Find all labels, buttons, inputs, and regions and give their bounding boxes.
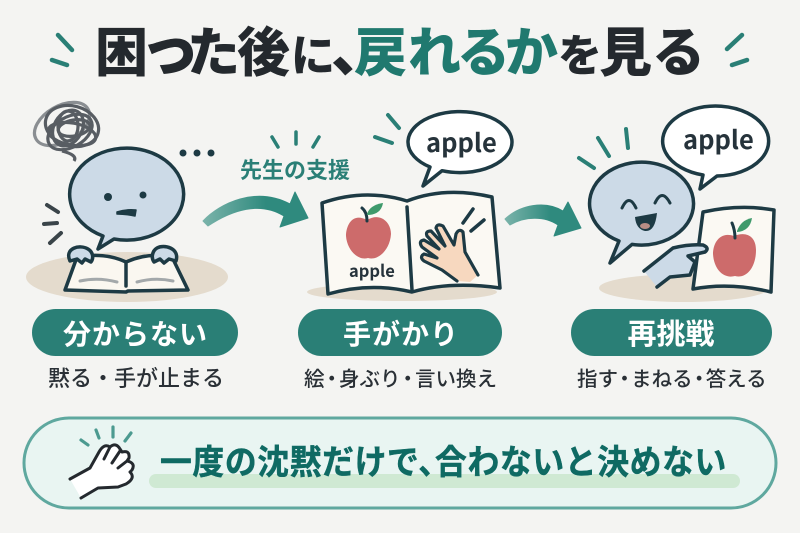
step pill: hints: 手がかり bbox=[343, 318, 459, 350]
speech bubble: apple bbox=[663, 106, 769, 189]
speech bubble: apple: apple bbox=[426, 123, 497, 160]
joy marks bbox=[579, 129, 628, 168]
speech bubble: apple bbox=[408, 112, 512, 186]
label: teacher support: 先生の支援 bbox=[240, 158, 350, 183]
step pill: retry bbox=[571, 309, 772, 356]
picture book bbox=[322, 192, 500, 294]
callout text: 一度の沈黙だけで、合わないと決めない bbox=[160, 443, 727, 481]
icon: hand bbox=[70, 427, 133, 498]
icon: gesturing hand bbox=[420, 225, 478, 282]
title: た bbox=[187, 24, 240, 83]
speech bubble: apple: apple bbox=[683, 120, 754, 157]
surprise marks bbox=[44, 205, 61, 243]
title: れ bbox=[408, 24, 461, 83]
title: に bbox=[291, 32, 335, 81]
highlight band bbox=[149, 474, 740, 488]
title: か bbox=[505, 24, 558, 83]
scene: retry bbox=[579, 106, 774, 302]
character: speech bubble head bbox=[70, 148, 184, 249]
title: っ bbox=[140, 17, 200, 84]
callout panel bbox=[24, 418, 776, 508]
open book bbox=[65, 255, 188, 292]
arrow: teacher support bbox=[203, 192, 308, 227]
marks bbox=[375, 115, 399, 143]
table shadow bbox=[26, 252, 228, 302]
title: 、 bbox=[331, 19, 389, 84]
table shadow bbox=[307, 283, 497, 301]
hands bbox=[69, 247, 177, 263]
scene: does not understand bbox=[26, 93, 228, 302]
character: smiling bubble bbox=[590, 162, 694, 263]
caption: step 3: 指す・まねる・答える bbox=[577, 367, 767, 391]
title: 戻 bbox=[354, 24, 407, 83]
step pill: does not understand: 分からない bbox=[63, 319, 208, 350]
pointing hand bbox=[644, 245, 707, 287]
caption: step 1: 黙る・手が止まる bbox=[48, 366, 224, 391]
title: 困 bbox=[95, 24, 148, 83]
icon: apple bbox=[346, 203, 391, 258]
title: 見 bbox=[599, 24, 652, 83]
arrow: to retry bbox=[505, 202, 581, 236]
title: る bbox=[457, 24, 510, 83]
icon: confused scribble bbox=[27, 93, 103, 161]
apple card bbox=[693, 207, 774, 292]
table shadow bbox=[599, 274, 769, 302]
title: 後 bbox=[237, 24, 290, 83]
icon: ellipsis bbox=[180, 150, 214, 156]
caption: step 2: 絵・身ぶり・言い換え bbox=[304, 368, 497, 391]
step pill: does not understand bbox=[32, 309, 238, 356]
scene: hints bbox=[307, 112, 512, 301]
title: を bbox=[558, 32, 602, 81]
step pill: retry: 再挑戦 bbox=[627, 318, 715, 351]
apple caption: apple bbox=[349, 258, 395, 282]
title: る bbox=[652, 24, 705, 83]
title accent marks bbox=[52, 35, 747, 65]
step pill: hints bbox=[298, 309, 502, 356]
support marks bbox=[272, 132, 319, 147]
